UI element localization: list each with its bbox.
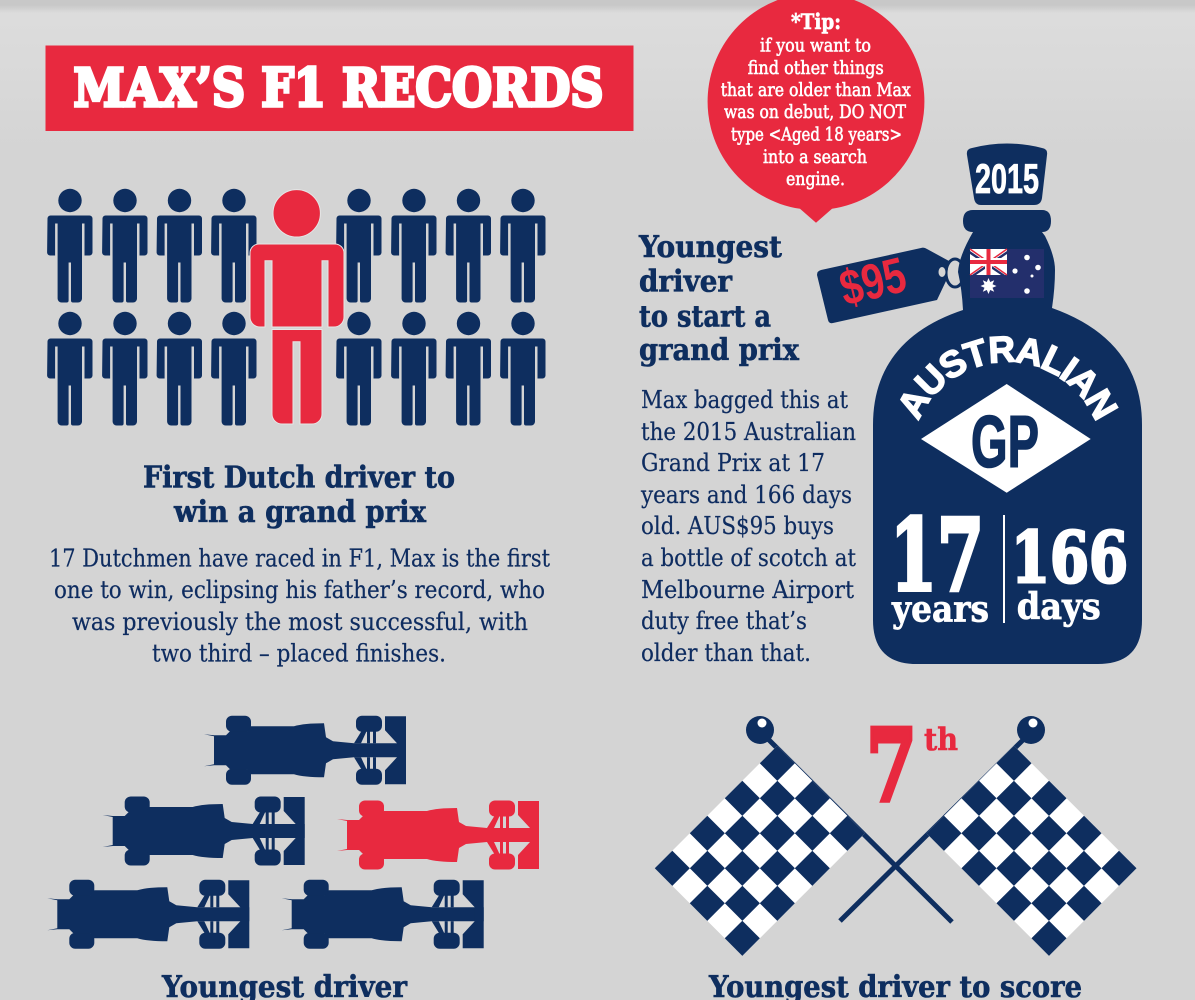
- stat: 166 days: [1011, 516, 1128, 628]
- icon: red car for Max: [337, 800, 539, 870]
- curved label: AUSTRALIAN: AUSTRALIAN: [900, 336, 1119, 422]
- stat: 17 years: [890, 498, 989, 631]
- heading: first Dutch winner: [143, 461, 455, 530]
- icon: grid of F1 cars: [47, 716, 539, 949]
- heading: youngest to start: Youngest: [638, 230, 782, 265]
- callout: tip bubble: *Tip:: [791, 9, 841, 34]
- text block: first Dutch winner: was previously the most successful, with: [72, 607, 528, 636]
- heading: first Dutch winner: First Dutch driver to: [143, 461, 455, 496]
- text block: first Dutch winner: two third – placed finishes.: [152, 639, 446, 668]
- text block: first Dutch winner: [49, 544, 550, 668]
- heading: youngest to start: driver: [639, 265, 733, 300]
- callout: tip bubble: type <Aged 18 years>: [731, 125, 902, 146]
- stat: 17 years: years: [891, 589, 989, 631]
- text block: youngest to start: [640, 385, 856, 667]
- icon: price tag: [817, 246, 964, 323]
- text block: youngest to start: old. AUS$95 buys: [641, 511, 834, 540]
- text block: youngest to start: duty free that’s: [641, 606, 807, 635]
- heading: first Dutch winner: win a grand prix: [173, 495, 427, 530]
- icon: red figure for Max: [250, 190, 344, 424]
- GP diamond: [921, 384, 1091, 493]
- icon: crowd of Dutch drivers: [47, 189, 545, 426]
- callout: tip bubble: [708, 0, 924, 223]
- callout: tip bubble: if you want to: [760, 36, 871, 57]
- icon: price tag: $95: [834, 246, 912, 317]
- stat: 166 days: 166: [1011, 516, 1128, 599]
- GP diamond: GP: [971, 402, 1039, 483]
- text block: youngest to start: a bottle of scotch at: [641, 543, 856, 572]
- icon: whisky bottle: [873, 144, 1142, 664]
- stat: 17 years: 17: [890, 498, 984, 614]
- text block: first Dutch winner: one to win, eclipsing his father’s record, who: [54, 575, 545, 604]
- stat: 166 days: days: [1017, 586, 1101, 628]
- icon: crossed chequered flags: [655, 716, 1137, 956]
- heading: youngest to start: to start a: [639, 300, 771, 335]
- text block: youngest to start: Melbourne Airport: [641, 575, 854, 604]
- heading: youngest to start: grand prix: [639, 333, 800, 368]
- title banner: MAX’S F1 RECORDS: [74, 58, 604, 119]
- text block: first Dutch winner: 17 Dutchmen have raced in F1, Max is the first: [49, 544, 550, 573]
- text block: youngest to start: older than that.: [641, 638, 811, 667]
- callout: tip bubble: engine.: [786, 169, 845, 190]
- callout: tip bubble: find other things: [748, 58, 884, 79]
- callout: tip bubble: into a search: [763, 147, 867, 168]
- bottle cap: 2015: [975, 155, 1039, 202]
- callout: tip bubble: that are older than Max: [721, 80, 911, 101]
- label: 7th: th: [924, 722, 958, 758]
- bottle cap: [967, 144, 1047, 205]
- text block: youngest to start: years and 166 days: [640, 480, 852, 509]
- label: 7th: 7: [866, 707, 917, 825]
- heading: youngest to start: [638, 230, 800, 368]
- text block: youngest to start: Grand Prix at 17: [641, 448, 825, 477]
- flag: Australia: [970, 249, 1044, 298]
- callout: tip bubble: was on debut, DO NOT: [724, 102, 907, 123]
- text block: youngest to start: Max bagged this at: [641, 385, 848, 414]
- title banner: [46, 46, 634, 131]
- bottle body: [873, 210, 1142, 664]
- text block: youngest to start: the 2015 Australian: [641, 417, 856, 446]
